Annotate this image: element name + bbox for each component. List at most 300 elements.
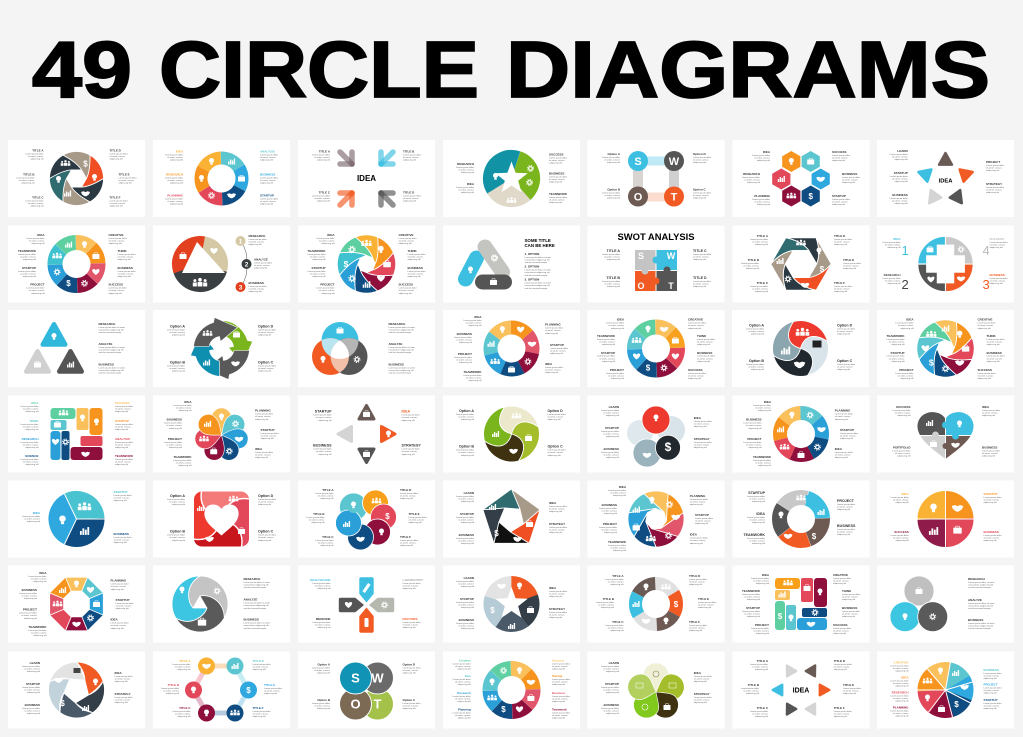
labels: STRATEGY (549, 607, 565, 611)
labels: TITLE E (698, 597, 709, 601)
labels: IDEA (327, 233, 335, 237)
labels: STARTUP (315, 410, 332, 414)
labels: TITLE D (689, 574, 701, 578)
panel: idea with six triangles (732, 652, 870, 728)
labels: TITLE D (110, 148, 122, 152)
labels: RESEARCH (457, 162, 474, 166)
labels: Option A (749, 324, 764, 328)
labels: MEDICINE (316, 617, 330, 621)
labels: BUSINESS (457, 332, 472, 336)
labels (886, 318, 1005, 380)
heading (524, 238, 555, 248)
labels: SUCCESS (688, 368, 703, 372)
labels: BUSINESS (837, 524, 856, 528)
labels (968, 577, 995, 630)
labels: TEAMWORK (464, 370, 482, 374)
panel: puzzle ring (443, 310, 580, 387)
labels: ANALYSIS (115, 437, 130, 441)
labels: BUSINESS (459, 533, 474, 537)
panel: seven-part rounded ring (732, 396, 870, 472)
labels (743, 400, 858, 467)
labels (167, 324, 276, 373)
labels (313, 410, 421, 456)
labels: STARTUP (695, 513, 709, 517)
heading: CAN BE HERE (524, 243, 555, 248)
option list: 1. OPTION (524, 252, 539, 256)
labels: LABORATORY (402, 578, 423, 582)
labels: SCIENCE (25, 454, 38, 458)
labels: SUCCESS (398, 283, 413, 287)
labels: BUSINESS (98, 362, 114, 366)
title: CIRCLE (159, 25, 479, 114)
labels: Startup (552, 674, 563, 678)
labels (20, 401, 134, 466)
panel: six connected nodes (153, 652, 290, 728)
labels: Option B (459, 445, 474, 449)
labels (601, 661, 712, 715)
labels: PROJECT (320, 283, 335, 287)
labels: PROJECT (610, 368, 624, 372)
labels: BUSINESS (984, 668, 999, 672)
diagram: swirl (162, 573, 230, 642)
labels: TITLE F (252, 706, 264, 710)
labels (244, 577, 270, 630)
panel: star circle (443, 140, 580, 217)
panel: SWOT overlapping circles (298, 652, 435, 728)
labels (746, 324, 855, 371)
labels: TITLE D (693, 276, 707, 280)
labels: BUSINESS (167, 418, 182, 422)
labels: STARTUP (260, 194, 274, 198)
panel: five-colour star circle (443, 566, 580, 642)
labels (892, 405, 1000, 458)
labels: CREATIVE (108, 233, 123, 237)
labels: IDEA (33, 511, 41, 515)
labels: TITLE C (693, 249, 707, 253)
labels (312, 662, 421, 710)
panel: three-part swirl (153, 566, 290, 642)
labels: DOCTORS (402, 617, 417, 621)
labels: BUSINESS (25, 703, 40, 707)
labels (596, 574, 716, 632)
diagram: triangles (338, 406, 395, 462)
diagram: ring (193, 150, 250, 207)
labels (882, 237, 1008, 285)
diagram: ring (771, 489, 831, 549)
labels: TEAMWORK (753, 455, 772, 459)
labels: RESEARCH (244, 577, 260, 581)
labels: IDEA (694, 671, 702, 675)
labels: STARTUP (460, 597, 474, 601)
labels: PLANNING (255, 409, 271, 413)
panel: eight-blade swirl (298, 226, 435, 302)
diagram: heart (917, 412, 974, 458)
labels: TITLE F (834, 281, 845, 285)
panel: puzzle heart (877, 396, 1014, 472)
labels: TITLE B (748, 683, 760, 687)
labels: Option A (607, 152, 621, 156)
diagram: SWOT nodes (628, 151, 684, 206)
labels: SUCCESS (108, 283, 123, 287)
labels: TITLE B (168, 683, 180, 687)
diagram: swirl (917, 320, 974, 377)
diagram: ring (626, 318, 686, 379)
diagram: petals (193, 408, 250, 464)
labels: PLANNING (893, 706, 909, 710)
labels: TEAMWORK (174, 455, 192, 459)
labels: Option B (607, 188, 621, 192)
labels: TITLE E (118, 172, 130, 176)
diagram: puzzle (635, 250, 677, 291)
labels: Option A (317, 662, 331, 666)
labels: PROJECT (986, 160, 1000, 164)
labels (22, 490, 132, 544)
labels: TEAMWORK (742, 589, 761, 593)
labels: SUCCESS (896, 405, 910, 409)
labels: SUCCESS (990, 237, 1004, 241)
labels (22, 661, 133, 715)
labels: PLANNING (690, 494, 706, 498)
labels (742, 573, 860, 635)
labels: RESEARCH (884, 273, 900, 277)
panel: SWOT analysis puzzle (588, 226, 724, 302)
labels (601, 405, 712, 459)
labels: BUSINESS (968, 618, 983, 622)
labels: RESEARCH (968, 577, 985, 581)
labels: TITLE A (757, 234, 769, 238)
labels (165, 150, 278, 206)
diagram: node ring (185, 658, 257, 722)
diagram: hexagon swirl (769, 235, 833, 293)
panel: medical cross circle (877, 226, 1014, 302)
labels: Option B (749, 359, 764, 363)
labels: IDEA (255, 447, 263, 451)
diagram: woven square (50, 408, 102, 460)
diagram: SWOT circles: W (371, 670, 384, 686)
labels: TEAMWORK (115, 454, 134, 458)
diagram: SWOT circles (340, 662, 394, 720)
labels: STARTUP (894, 171, 908, 175)
labels: LEARN (897, 149, 908, 153)
labels: PROJECT (755, 623, 769, 627)
labels: TEAMWORK (18, 249, 37, 253)
labels: BUSINESS (408, 266, 423, 270)
labels: THINK (986, 334, 996, 338)
labels (307, 233, 426, 295)
labels: TITLE A (319, 150, 331, 154)
panel: heart in rounded square (153, 480, 290, 558)
labels: TITLE D (400, 488, 412, 492)
labels: TITLE F (689, 620, 700, 624)
labels: CREATIVE (398, 233, 413, 237)
labels: BUSINESS (244, 618, 259, 622)
labels: CREATIVE (894, 660, 908, 664)
labels (167, 494, 276, 542)
labels (741, 234, 861, 293)
labels: IDEA (114, 671, 123, 675)
labels: SUCCESS (832, 150, 847, 154)
diagram: puzzle: T (668, 281, 674, 291)
labels: ANALYSIS (260, 150, 275, 154)
panel: green pinwheel (443, 396, 580, 472)
labels: STRATEGY (549, 522, 565, 526)
labels: STARTUP (114, 490, 127, 494)
labels: Option A (170, 494, 185, 498)
labels: LEARN (609, 405, 619, 409)
labels: Option C (548, 445, 563, 449)
labels: ANALYZE (388, 342, 402, 346)
labels: PROJECT (747, 437, 762, 441)
labels: Option D (258, 494, 274, 498)
labels: STARTUP (605, 682, 619, 686)
labels: TITLE A (322, 488, 334, 492)
diagram: woven square (775, 578, 827, 630)
panel: six-blade shutter circle (8, 140, 145, 217)
heading: SWOT ANALYSIS (618, 231, 694, 242)
labels (602, 249, 711, 288)
labels: PLANNING (835, 409, 851, 413)
labels: CREATIVE (978, 318, 992, 322)
labels: SUCCESS (978, 368, 992, 372)
panel: six-colour arrow ring (153, 140, 290, 217)
labels: IDEA (617, 318, 625, 322)
labels: STRATEGY (694, 692, 710, 696)
labels: Option D (837, 324, 853, 328)
labels: TITLE B (403, 150, 415, 154)
labels: TITLE A (32, 148, 44, 152)
labels: STARTUP (891, 351, 904, 355)
labels (891, 492, 1002, 542)
step numbers: 1 (902, 243, 909, 258)
labels: IDEA (549, 586, 557, 590)
labels (18, 233, 136, 295)
diagram: venn (312, 322, 368, 375)
labels: Research (457, 691, 471, 695)
panel: seven-blade shutter (588, 480, 724, 558)
labels: TEAMWORK (608, 540, 627, 544)
labels: RESEARCH (743, 172, 760, 176)
diagram: SWOT circles: T (374, 696, 382, 712)
labels: IDEA (764, 400, 772, 404)
labels: PROJECT (30, 283, 45, 287)
diagram: SWOT nodes: T (671, 192, 678, 204)
labels: Option A (170, 324, 185, 328)
panel: three triangles (8, 310, 145, 387)
panel: woven rounded square (8, 396, 145, 472)
labels: BUSINESS (842, 606, 857, 610)
labels (19, 571, 134, 637)
labels: Option C (837, 359, 853, 363)
labels: STRATEGY (114, 692, 131, 696)
labels (456, 409, 566, 457)
labels (453, 658, 570, 720)
labels: BUSINESS (549, 172, 564, 176)
labels: PROJECT (837, 499, 855, 503)
labels: TITLE E (264, 683, 275, 687)
diagram: petals (624, 663, 688, 723)
diagram: rounded triangle (466, 247, 504, 285)
labels: IDEA (31, 401, 39, 405)
panel: idea pentagon of triangles (877, 140, 1014, 217)
labels: STARTUP (840, 428, 854, 432)
labels: IDEA (902, 492, 910, 496)
labels: TITLE D (252, 659, 265, 663)
labels: BUSINESS (388, 362, 404, 366)
labels: TITLE A (607, 249, 620, 253)
panel: octagon ring (8, 566, 145, 642)
labels: BUSINESS (459, 618, 474, 622)
labels (599, 485, 713, 552)
diagram: pinwheel (773, 321, 828, 376)
labels: TITLE C (319, 190, 331, 194)
labels: PROJECT (23, 608, 37, 612)
labels (98, 322, 125, 375)
panel: five-part puzzle ring (732, 480, 870, 558)
labels: HEALTHCARE (310, 578, 330, 582)
labels: TEAMWORK (549, 192, 568, 196)
labels: TITLE B (23, 172, 35, 176)
labels: ANALYZE (98, 342, 112, 346)
title: 49 (32, 25, 132, 114)
labels: IDEA (901, 676, 909, 680)
panel: idea arrows (298, 140, 435, 217)
panel: triangle circle with numbered steps (153, 226, 290, 302)
labels (164, 400, 279, 467)
labels: LEARN (30, 661, 40, 665)
labels: IDEA (184, 400, 192, 404)
labels: Planning (458, 708, 471, 712)
labels: IDEA (176, 150, 184, 154)
labels: STARTUP (984, 492, 997, 496)
labels (597, 318, 715, 380)
labels: ANALYZE (968, 598, 982, 602)
labels: RESEARCH (388, 322, 405, 326)
panel: seven-slice pie (877, 652, 1014, 728)
labels: TEAMWORK (886, 334, 905, 338)
labels: THINK (118, 249, 127, 253)
labels (890, 149, 1004, 205)
labels: TITLE B (606, 276, 620, 280)
labels: IDEA (37, 233, 45, 237)
diagram: pie (58, 494, 104, 544)
labels: IDEA (893, 237, 901, 241)
labels: BUSINESS (22, 588, 37, 592)
labels: Option D (258, 324, 274, 328)
labels: STARTUP (550, 343, 564, 347)
diagram: puzzle: S (638, 251, 644, 261)
panel: overlapping six discs (298, 480, 435, 558)
labels: BUSINESS (114, 532, 129, 536)
diagram: star in circle (491, 158, 534, 203)
labels: TITLE C (322, 535, 334, 539)
panel: four arrows cycle (153, 310, 290, 387)
labels: STRATEGY (694, 437, 710, 441)
labels (16, 148, 137, 208)
labels: Idea (465, 674, 471, 678)
labels: SUCCESS (894, 530, 909, 534)
panel: eight-part pentagon ring (443, 652, 580, 728)
labels: Business (552, 691, 566, 695)
labels (310, 578, 423, 629)
diagram: SWOT nodes: O (634, 192, 643, 204)
panel: hexagon ring (732, 140, 870, 217)
labels: TITLE E (843, 258, 854, 262)
labels: BUSINESS (118, 266, 133, 270)
labels: IDEA (110, 618, 119, 622)
diagram: star circle (490, 582, 534, 629)
labels (456, 576, 567, 630)
diagram: discs (336, 490, 396, 550)
panel: four-quadrant pie (877, 480, 1014, 558)
labels: IDEA (690, 533, 698, 537)
labels: IDEA (467, 182, 475, 186)
option list (524, 252, 551, 290)
labels: Option B (170, 360, 185, 364)
labels (388, 322, 415, 375)
labels (454, 315, 568, 382)
labels: BUSINESS (313, 444, 332, 448)
labels: PLANNING (754, 194, 771, 198)
panel: SWOT linked circles (588, 140, 724, 217)
labels: Option C (693, 188, 706, 192)
labels: LEARN (464, 576, 474, 580)
panel: overlapping discs (588, 396, 724, 472)
labels: Option C (258, 360, 274, 364)
labels: TITLE D (834, 234, 846, 238)
step numbers: 2 (902, 277, 909, 292)
diagram: circle with triangle hole (180, 242, 225, 286)
labels: IDEA (982, 405, 990, 409)
labels: Creative (459, 658, 471, 662)
labels: Option A (459, 409, 474, 413)
labels: PROJECT (168, 437, 182, 441)
diagram: numbered steps: 1 (239, 238, 243, 245)
labels: LEARN (464, 491, 474, 495)
diagram: ring (482, 319, 541, 378)
labels: BUSINESS (260, 172, 275, 176)
labels: ANALYZE (254, 258, 268, 262)
labels: TITLE C (757, 281, 769, 285)
panel: woven rounded square swirl (732, 566, 870, 642)
labels (890, 660, 1002, 718)
diagram: ring (628, 576, 684, 632)
labels: Success (552, 658, 565, 662)
labels: STARTUP (260, 428, 274, 432)
labels: STARTUP (601, 351, 615, 355)
labels (312, 150, 421, 203)
labels: TITLE F (110, 196, 121, 200)
labels: Option B (170, 530, 185, 534)
labels: TITLE B (603, 597, 615, 601)
labels: STARTUP (312, 266, 326, 270)
labels: TITLE C (612, 620, 624, 624)
labels: BUSINESS (604, 703, 619, 707)
labels: PLANNING (167, 194, 184, 198)
labels: TITLE E (843, 683, 854, 687)
labels: TITLE C (757, 706, 769, 710)
labels: STARTUP (605, 426, 619, 430)
labels: THINK (408, 249, 417, 253)
diagram: puzzle: W (667, 251, 676, 261)
panel: lobed six-part ring (588, 566, 724, 642)
labels: IDEA (39, 571, 47, 575)
labels: BUSINESS (990, 273, 1005, 277)
heading: SOME TITLE (524, 238, 551, 243)
diagram: numbered steps: 2 (245, 261, 249, 268)
labels: IDEA (906, 318, 914, 322)
labels: RESEARCH (98, 322, 115, 326)
labels: STARTUP (22, 266, 36, 270)
